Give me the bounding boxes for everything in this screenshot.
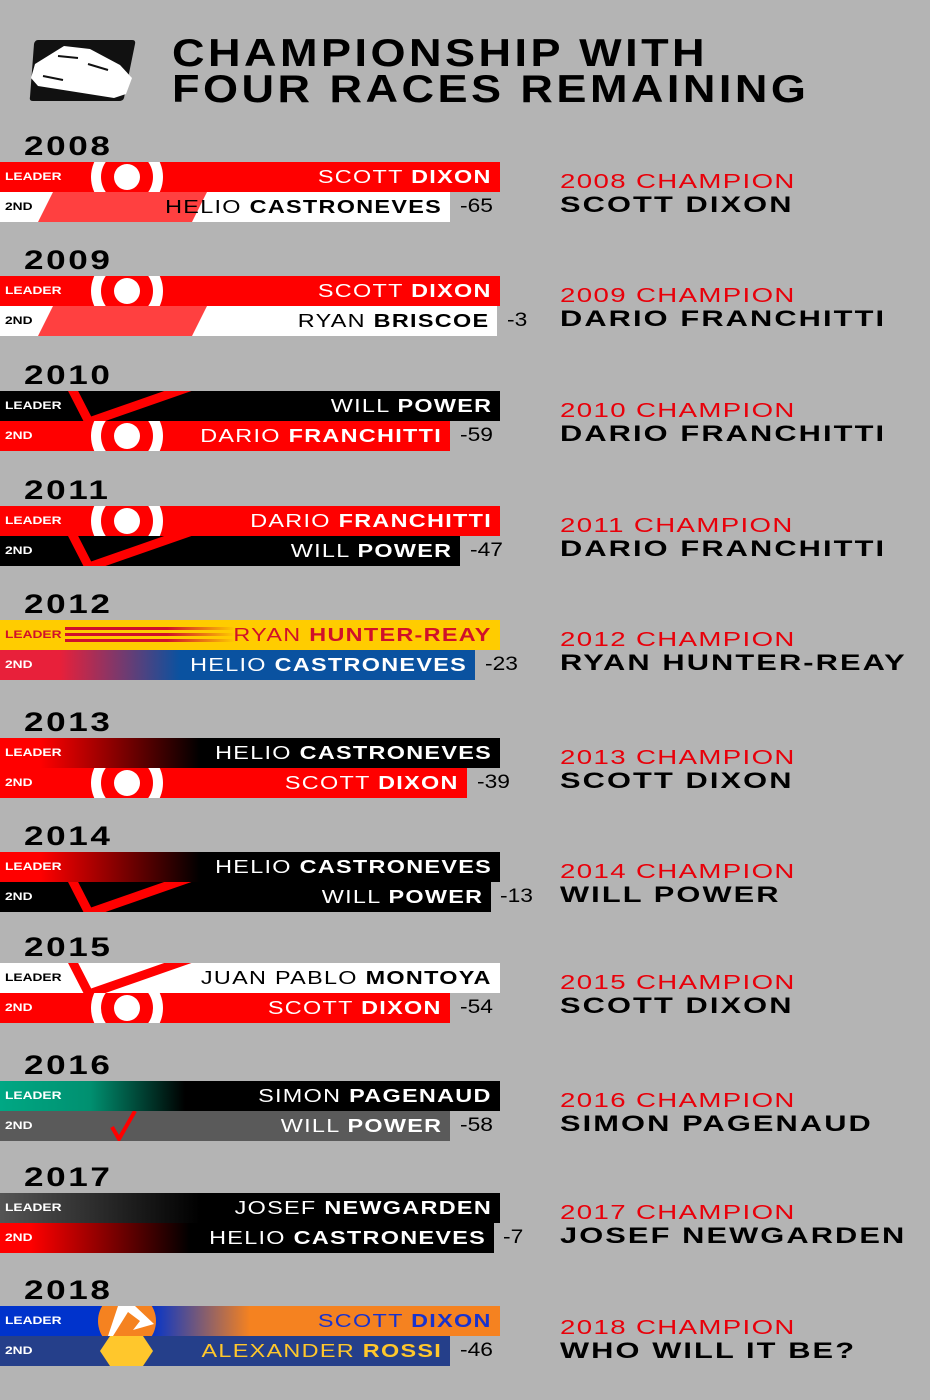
year: 2013 [24,707,113,737]
block: 2015 [0,932,796,1023]
year: 2011 [24,475,111,505]
gap: -54 [460,997,493,1018]
block: 2013 [0,707,796,798]
second bar: HELIO CASTRONEVES [209,1228,486,1248]
leader bar [0,963,500,993]
leader bar: WILL POWER [330,396,492,416]
second bar [0,1223,494,1253]
leader bar: DARIO FRANCHITTI [250,511,492,531]
title: CHAMPIONSHIP WITH [172,32,708,75]
second bar: 2ND [5,430,33,442]
leader bar: LEADER [5,285,62,297]
title: FOUR RACES REMAINING [172,68,809,111]
leader bar: LEADER [5,629,62,641]
second bar [0,421,450,451]
champion: SCOTT DIXON [560,993,794,1018]
leader bar: LEADER [5,972,62,984]
champion: 2014 CHAMPION [560,861,796,883]
gap: -59 [460,425,493,446]
second bar: SCOTT DIXON [285,773,459,793]
champion [560,861,796,907]
second bar [0,1111,450,1141]
leader bar [0,1081,500,1111]
leader bar [0,506,500,536]
second bar [0,768,467,798]
leader bar: RYAN HUNTER-REAY [234,625,492,645]
gap: -65 [460,196,493,217]
gap: -3 [507,310,527,331]
champion: 2016 CHAMPION [560,1090,796,1112]
champion [560,171,796,217]
second bar: 2ND [5,659,33,671]
champion: DARIO FRANCHITTI [560,421,886,446]
champion: 2010 CHAMPION [560,400,796,422]
champion [560,972,796,1018]
leader bar [0,391,500,421]
title [172,32,809,111]
second bar: WILL POWER [321,887,483,907]
second bar: 2ND [5,201,33,213]
gap: -23 [485,654,518,675]
logo: indycar [30,40,136,101]
champion: RYAN HUNTER-REAY [560,650,907,675]
champion: WILL POWER [560,882,781,907]
leader bar: HELIO CASTRONEVES [215,857,492,877]
champion: DARIO FRANCHITTI [560,536,886,561]
leader bar [0,852,500,882]
second bar [0,993,450,1023]
second bar: 2ND [5,1232,33,1244]
champion [560,285,886,331]
second bar: DARIO FRANCHITTI [200,426,442,446]
second bar: RYAN BRISCOE [297,311,489,331]
leader bar: JOSEF NEWGARDEN [235,1198,492,1218]
second bar: 2ND [5,1002,33,1014]
gap: -58 [460,1115,493,1136]
block: 2010 [0,360,886,451]
gap: -13 [500,886,533,907]
gap: -39 [477,772,510,793]
year: 2012 [24,589,113,619]
year: 2015 [24,932,113,962]
second bar: SCOTT DIXON [268,998,442,1018]
year: 2008 [24,131,113,161]
champion [560,1202,906,1248]
second bar: HELIO CASTRONEVES [190,655,467,675]
second bar: 2ND [5,891,33,903]
champion: 2018 CHAMPION [560,1317,796,1339]
champion: SCOTT DIXON [560,192,794,217]
champion: 2015 CHAMPION [560,972,796,994]
leader bar: LEADER [5,1090,62,1102]
second bar: WILL POWER [280,1116,442,1136]
second bar: 2ND [5,545,33,557]
block: 2016 [0,1050,873,1141]
gap: -46 [460,1340,493,1361]
champion: 2011 CHAMPION [560,515,794,537]
second bar: 2ND [5,1345,33,1357]
leader bar [0,1193,500,1223]
leader bar: JUAN PABLO MONTOYA [201,968,492,988]
leader bar: SIMON PAGENAUD [258,1086,492,1106]
year: 2009 [24,245,113,275]
block: 2018 [0,1275,856,1366]
champion: SIMON PAGENAUD [560,1111,873,1136]
champion: 2008 CHAMPION [560,171,796,193]
champion: JOSEF NEWGARDEN [560,1223,906,1248]
leader bar: LEADER [5,747,62,759]
leader bar [0,620,500,650]
second bar: ALEXANDER ROSSI [201,1341,442,1361]
year: 2016 [24,1050,113,1080]
champion [560,1317,856,1363]
second bar: WILL POWER [290,541,452,561]
champion [560,629,907,675]
block: 2009 [0,245,886,336]
champion [560,515,886,561]
leader bar: LEADER [5,1202,62,1214]
champion: 2013 CHAMPION [560,747,796,769]
leader bar [0,738,500,768]
leader bar: SCOTT DIXON [318,167,492,187]
leader bar: LEADER [5,515,62,527]
leader bar [0,1306,500,1336]
leader bar: LEADER [5,171,62,183]
champion [560,400,886,446]
block: 2008 [0,131,796,222]
block: 2011 [0,475,886,566]
second bar [0,1336,450,1366]
champion: SCOTT DIXON [560,768,794,793]
second bar [0,650,475,680]
year: 2018 [24,1275,113,1305]
gap: -7 [503,1227,523,1248]
second bar [0,882,491,912]
second bar: 2ND [5,1120,33,1132]
year: 2017 [24,1162,113,1192]
leader bar [0,276,500,306]
champion: 2009 CHAMPION [560,285,796,307]
block: 2012 [0,589,907,680]
second bar: 2ND [5,315,33,327]
year: 2014 [24,821,113,851]
leader bar: SCOTT DIXON [318,281,492,301]
year: 2010 [24,360,113,390]
leader bar: SCOTT DIXON [318,1311,492,1331]
champion [560,747,796,793]
second bar [0,536,460,566]
champion: DARIO FRANCHITTI [560,306,886,331]
second bar [0,192,450,222]
leader bar: LEADER [5,400,62,412]
champion [560,1090,873,1136]
second bar [0,306,497,336]
block: 2014 [0,821,796,912]
second bar: HELIO CASTRONEVES [165,197,442,217]
champion: 2017 CHAMPION [560,1202,796,1224]
champion: 2012 CHAMPION [560,629,796,651]
leader bar: LEADER [5,861,62,873]
leader bar: HELIO CASTRONEVES [215,743,492,763]
gap: -47 [470,540,503,561]
second bar: 2ND [5,777,33,789]
leader bar [0,162,500,192]
champion: WHO WILL IT BE? [560,1338,856,1363]
block: 2017 [0,1162,906,1253]
leader bar: LEADER [5,1315,62,1327]
